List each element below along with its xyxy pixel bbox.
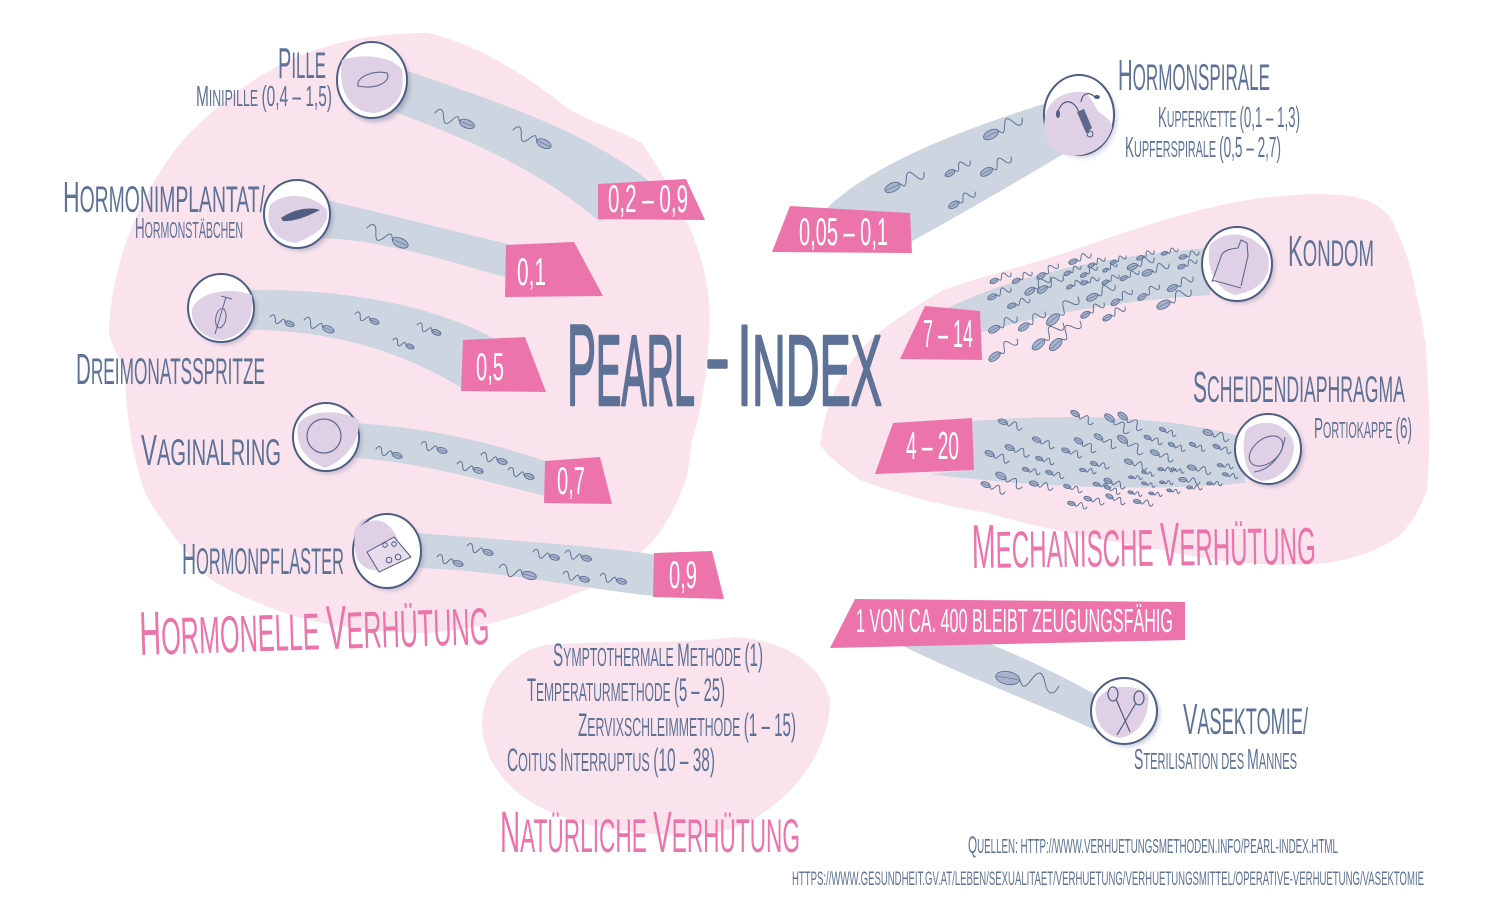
group: Hormonpflaster	[182, 514, 724, 599]
group: Dreimonatsspritze: DREIMONATSSPRITZE	[76, 345, 265, 394]
icon: diaphragm	[1235, 414, 1304, 487]
beam	[940, 248, 1210, 333]
value label	[772, 206, 912, 254]
label: Hormonimplantat: HORMONIMPLANTAT/	[63, 173, 265, 222]
label: Sterilisation des Mannes: STERILISATION DES MANNES	[1134, 744, 1297, 776]
icon: scissors	[1091, 678, 1160, 747]
heading: Mechanische Verhütung: MECHANISCHE VERHÜTUNG	[971, 509, 1316, 582]
value label	[653, 551, 724, 599]
heading: Natürliche Verhütung: NATÜRLICHE VERHÜTUNG	[500, 800, 800, 865]
beam	[248, 290, 505, 390]
sperm	[995, 666, 1061, 694]
sperm swarm	[986, 247, 1200, 364]
value label	[461, 337, 546, 392]
group: Hormonimplantat: HORMONSTÄBCHEN	[135, 213, 243, 245]
text block: natural methods	[507, 637, 796, 778]
sources	[792, 832, 1424, 890]
value label: 1 VON CA. 400 BLEIBT ZEUGUNGSFÄHIG	[856, 602, 1173, 639]
beam	[418, 533, 658, 596]
icon: syringe	[188, 274, 257, 345]
value label	[505, 242, 603, 297]
label: Pille: PILLE	[278, 39, 326, 88]
sperm	[882, 112, 1025, 211]
icon: implant	[264, 180, 333, 251]
value label: 4 – 20	[906, 425, 959, 468]
value label: 0,05 – 0,1	[799, 211, 888, 254]
beam	[895, 642, 1105, 730]
panel: hormonal methods background	[109, 33, 709, 633]
sperm	[436, 543, 627, 587]
icon: condom	[1202, 227, 1275, 304]
icon: pill	[337, 42, 410, 122]
label: Minipille: MINIPILLE (0,4 – 1,5)	[196, 81, 332, 113]
value label	[830, 599, 1185, 648]
group: Hormonspirale: HORMONSPIRALE	[1118, 51, 1270, 100]
value label	[598, 178, 705, 221]
sperm	[375, 441, 535, 482]
panel: natural methods background	[482, 637, 830, 835]
icon: ring	[293, 403, 362, 474]
value label: 0,5	[476, 346, 504, 389]
group: Kondom	[900, 227, 1374, 364]
group: Scheidendiaphragma	[875, 363, 1412, 509]
value label: 7 – 14	[923, 313, 973, 356]
text block: natural methods: SYMPTOTHERMALE METHODE (1)	[553, 637, 763, 673]
group: Hormonpflaster: HORMONPFLASTER	[182, 535, 344, 584]
title: PEARL	[567, 302, 695, 430]
label: Vasektomie: VASEKTOMIE/	[1183, 695, 1308, 744]
group: Vasektomie	[830, 599, 1308, 776]
value label	[875, 418, 974, 474]
beam	[355, 423, 548, 496]
title: -	[705, 308, 730, 408]
value label: 0,2 – 0,9	[608, 178, 688, 221]
group: Vaginalring	[141, 403, 612, 504]
sperm	[269, 311, 442, 351]
text block: natural methods: ZERVIXSCHLEIMMETHODE (1 – 15)	[578, 707, 796, 743]
text block: natural methods: TEMPERATURMETHODE (5 – 25)	[527, 672, 725, 708]
label: Vaginalring: VAGINALRING	[141, 426, 281, 475]
panel: mechanical methods background	[820, 194, 1429, 565]
heading: Hormonelle Verhütung: HORMONELLE VERHÜTUNG	[138, 589, 490, 669]
group: Hormonimplantat	[63, 173, 603, 297]
sperm	[364, 223, 410, 253]
text: INDEX	[737, 302, 882, 430]
icon: IUD	[1044, 75, 1117, 158]
value label: 0,9	[669, 554, 697, 597]
value label: 0,7	[557, 460, 585, 503]
value label: 0,1	[517, 251, 546, 294]
icon: patch	[353, 514, 424, 591]
group: Pille	[196, 39, 705, 222]
value label	[900, 306, 982, 360]
label: Kupferspirale: KUPFERSPIRALE (0,5 – 2,7)	[1125, 132, 1281, 164]
beam	[395, 70, 660, 222]
group: Dreimonatsspritze	[76, 274, 546, 394]
group: Hormonspirale	[772, 51, 1300, 254]
label: Kupferkette: KUPFERKETTE (0,1 – 1,3)	[1158, 102, 1300, 134]
sperm	[433, 108, 553, 153]
beam	[825, 102, 1070, 245]
sperm swarm	[980, 408, 1239, 509]
label: Kondom: KONDOM	[1288, 227, 1374, 276]
beam	[930, 417, 1245, 488]
label: Portiokappe: PORTIOKAPPE (6)	[1314, 413, 1412, 445]
beam	[320, 200, 520, 277]
text block: natural methods: COITUS INTERRUPTUS (10 – 38)	[507, 742, 715, 778]
